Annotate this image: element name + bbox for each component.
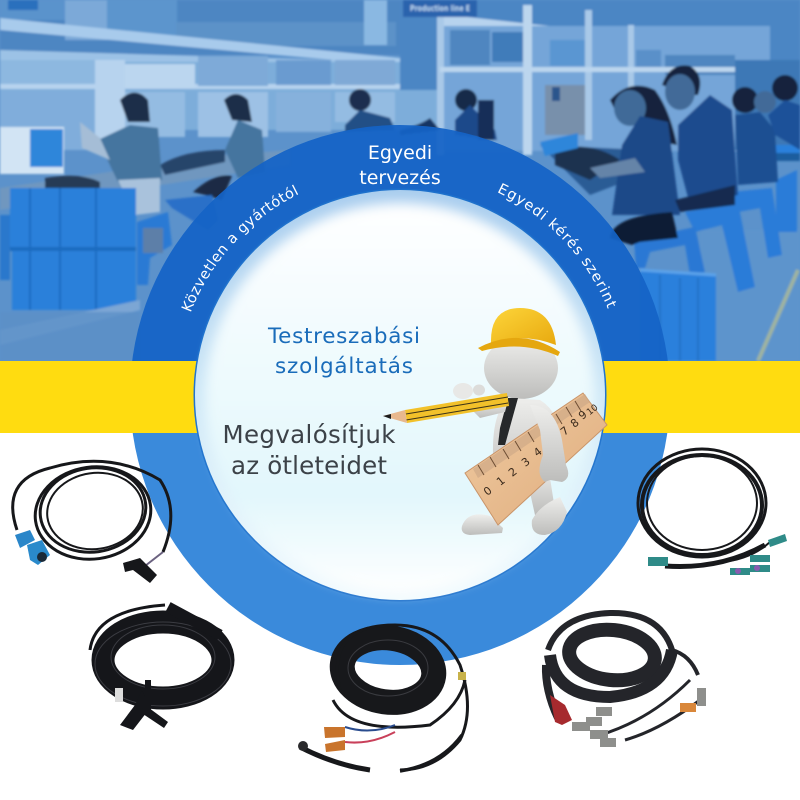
ruler: 10 xyxy=(585,403,601,418)
worker 2 xyxy=(193,94,265,200)
inner circle xyxy=(194,188,606,602)
blue ring upper xyxy=(130,125,670,395)
blue stools left xyxy=(137,195,218,285)
ruler: 3 xyxy=(519,455,533,470)
cartoon engineer xyxy=(383,308,607,535)
worker 1 xyxy=(80,92,162,215)
service heading xyxy=(267,324,420,379)
assembly table right xyxy=(540,133,800,195)
pencil xyxy=(383,393,509,423)
arm and hand xyxy=(453,383,568,482)
legs and feet xyxy=(462,465,567,535)
curved label: on request: Egyedi kérés szerint xyxy=(498,183,616,309)
tagline: Megvalósítjuk xyxy=(222,420,396,449)
right factory frames xyxy=(400,0,800,155)
cable: black coil with tube xyxy=(90,605,231,730)
heading: custom design: Egyedi xyxy=(368,142,432,164)
cable: blue connector xyxy=(13,459,171,583)
necktie xyxy=(498,398,518,445)
heading: custom design xyxy=(359,142,441,189)
cable: braided loom xyxy=(298,625,468,771)
ruler: 8 xyxy=(568,416,582,431)
tagline: az ötleteidet xyxy=(231,451,387,480)
blue stools right xyxy=(634,170,797,292)
ruler: 0 xyxy=(481,484,495,499)
blue crates left xyxy=(10,188,136,310)
factory photo xyxy=(0,0,800,361)
blue crate right xyxy=(640,270,716,361)
floor right xyxy=(700,230,800,361)
curved label: direct from manufacturer: Közvetlen a gyártótól xyxy=(181,184,298,312)
hard hat xyxy=(478,308,560,356)
service heading: szolgáltatás xyxy=(275,354,413,379)
heading: custom design: tervezés xyxy=(359,167,441,189)
worker 3 xyxy=(345,89,395,132)
cable: sleeved harness xyxy=(546,613,706,747)
ruler: 1 xyxy=(494,474,508,489)
head xyxy=(484,337,558,399)
workers right xyxy=(400,89,497,140)
ruler xyxy=(465,393,607,525)
blue ring lower xyxy=(130,395,670,665)
ruler: 2 xyxy=(506,465,520,480)
ruler: 9 xyxy=(576,408,590,423)
sign: production line: Production line E xyxy=(410,4,470,13)
cable: teal connectors xyxy=(638,449,787,575)
seated workers right xyxy=(590,65,800,245)
yellow band xyxy=(0,361,800,433)
ruler: 4 xyxy=(531,445,545,460)
ruler: 7 xyxy=(558,424,572,439)
torso xyxy=(493,398,562,490)
service heading: Testreszabási xyxy=(267,324,420,349)
tagline xyxy=(222,420,396,480)
monitor box xyxy=(0,127,64,174)
